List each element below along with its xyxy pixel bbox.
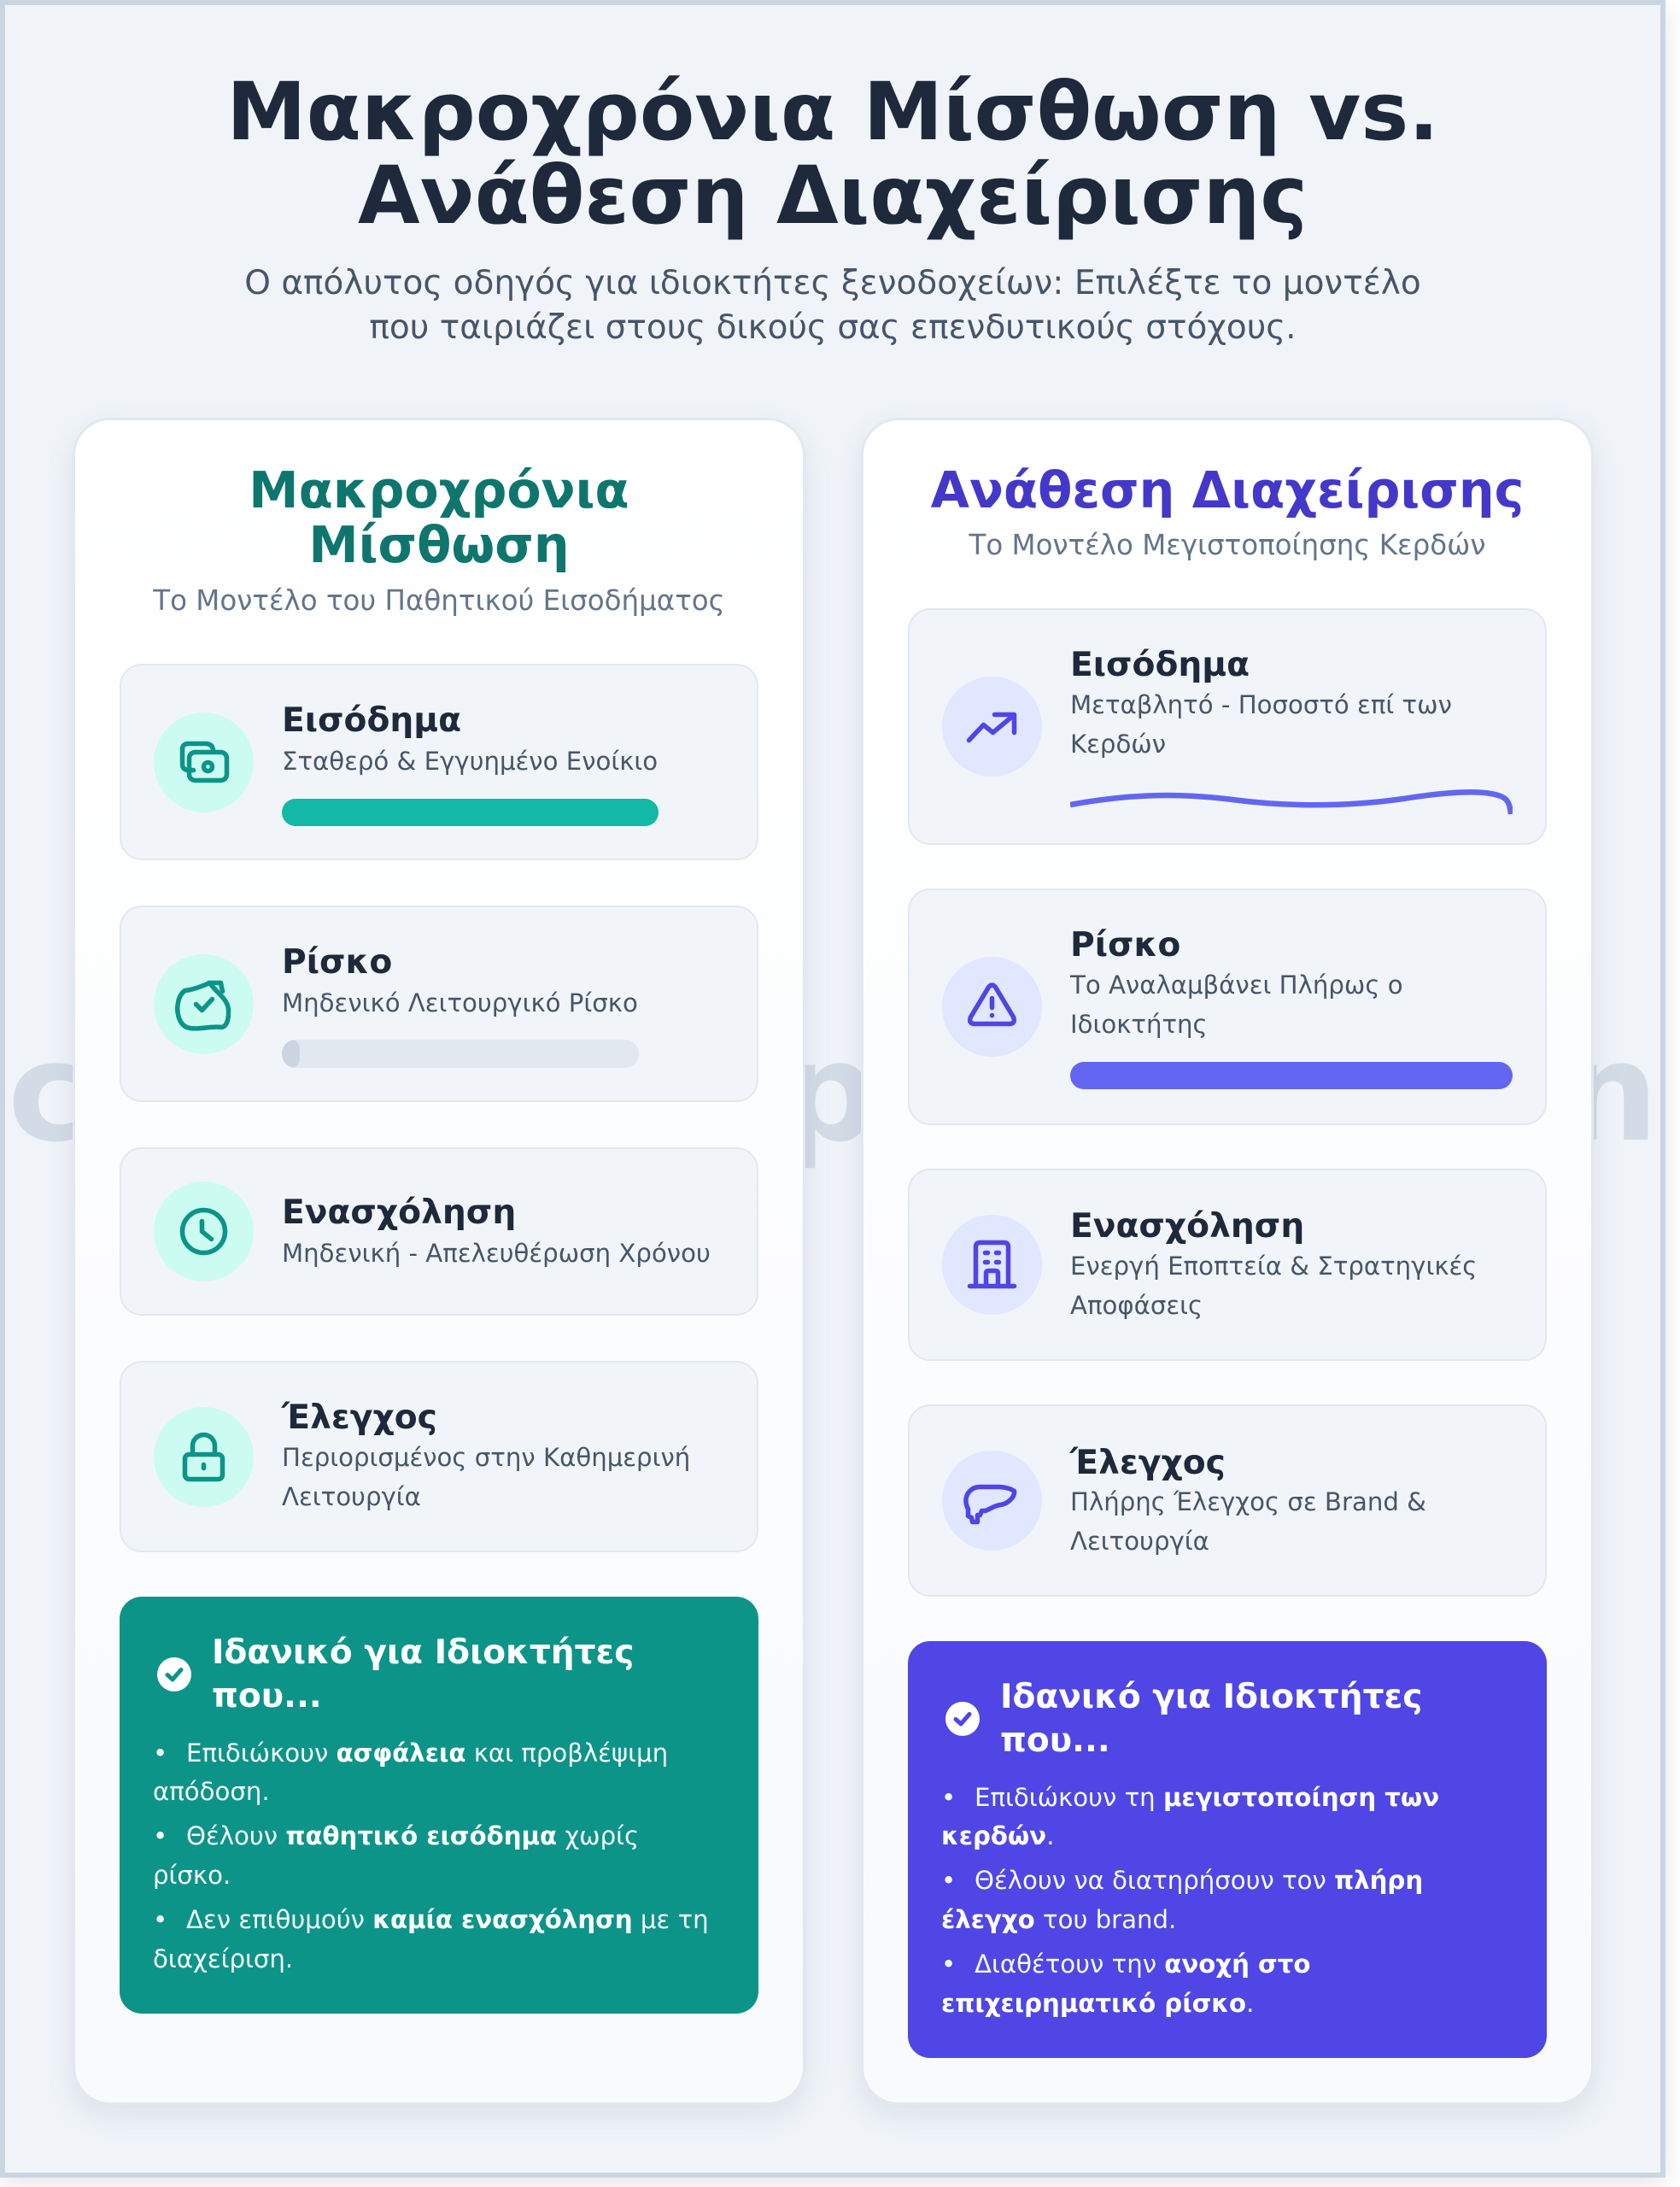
callout heading xyxy=(212,1633,634,1715)
heading: long-term lease: Μακροχρόνια xyxy=(249,461,629,519)
watermark letter c: c xyxy=(8,1012,89,1172)
icon: check badge xyxy=(945,1702,980,1736)
bullet list: Θέλουν να διατηρήσουν τον πλήρη xyxy=(975,1866,1423,1895)
row: risk (lease) xyxy=(120,906,758,1102)
bullet list: Δεν επιθυμούν καμία ενασχόληση με τη xyxy=(186,1905,709,1934)
heading: long-term lease: Μίσθωση xyxy=(308,516,570,574)
bullet list: διαχείριση. xyxy=(153,1944,293,1973)
watermark letter n: n xyxy=(1561,1012,1659,1172)
subheading: profit maximization model: Το Μοντέλο Μεγιστοποίησης Κερδών xyxy=(969,529,1486,561)
bullet list xyxy=(941,1783,1439,2018)
description: Κερδών xyxy=(1070,730,1166,759)
label: Ρίσκο xyxy=(282,943,392,981)
icon: shield check xyxy=(154,954,254,1054)
heading: long-term lease xyxy=(249,461,629,574)
title: Ανάθεση Διαχείρισης xyxy=(358,150,1308,243)
description xyxy=(1069,970,1403,1039)
callout heading: που... xyxy=(212,1677,322,1715)
description: Λειτουργία xyxy=(1070,1527,1209,1556)
bullet list: επιχειρηματικό ρίσκο. xyxy=(941,1989,1254,2018)
title: Μακροχρόνια Μίσθωση vs. xyxy=(226,66,1439,159)
description: Ενεργή Εποπτεία & Στρατηγικές xyxy=(1070,1251,1477,1280)
bullet list: • xyxy=(153,1905,167,1934)
label: Ενασχόληση xyxy=(282,1193,516,1232)
label: Ενασχόληση xyxy=(1070,1206,1304,1246)
panel: long-term lease xyxy=(73,418,805,2105)
description xyxy=(282,1443,690,1511)
callout heading: που... xyxy=(1000,1721,1110,1760)
icon: check badge xyxy=(157,1657,191,1692)
callout: ideal for owners (management) xyxy=(908,1641,1547,2058)
subtitle: Ο απόλυτος οδηγός για ιδιοκτήτες ξενοδοχείων: Επιλέξτε το μοντέλο xyxy=(244,263,1421,302)
subtitle xyxy=(244,263,1421,347)
description xyxy=(1070,690,1452,759)
icon: trending up xyxy=(942,677,1042,777)
bar: zero risk xyxy=(282,1040,639,1068)
bullet list: Επιδιώκουν τη μεγιστοποίηση των xyxy=(975,1783,1439,1812)
bar: full risk xyxy=(1070,1062,1513,1089)
description: Μεταβλητό - Ποσοστό επί των xyxy=(1070,690,1452,719)
row: control (management) xyxy=(908,1404,1547,1596)
icon: building xyxy=(942,1215,1042,1315)
description xyxy=(1070,1487,1426,1556)
bullet list: απόδοση. xyxy=(153,1777,270,1806)
description: Το Αναλαμβάνει Πλήρως ο xyxy=(1070,970,1403,1000)
row: income (management) xyxy=(908,608,1547,844)
title xyxy=(226,66,1439,243)
heading: management contract: Ανάθεση Διαχείρισης xyxy=(931,461,1524,519)
label: Ρίσκο xyxy=(1070,926,1180,964)
row: involvement (lease) xyxy=(120,1147,758,1316)
bar fill xyxy=(282,1040,300,1068)
description: Πλήρης Έλεγχος σε Brand & xyxy=(1070,1487,1426,1516)
subtitle: που ταιριάζει στους δικούς σας επενδυτικούς στόχους. xyxy=(369,308,1297,347)
row: risk (management) xyxy=(908,888,1547,1124)
callout heading: Ιδανικό για Ιδιοκτήτες xyxy=(212,1633,634,1672)
icon: lock xyxy=(154,1407,254,1507)
description: Σταθερό & Εγγυημένο Ενοίκιο xyxy=(282,747,658,776)
subheading: passive income model: Το Μοντέλο του Παθητικού Εισοδήματος xyxy=(153,584,725,617)
description xyxy=(1070,1251,1477,1319)
bar: fixed income xyxy=(282,799,659,826)
description: Λειτουργία xyxy=(282,1482,421,1511)
description: Μηδενικό Λειτουργικό Ρίσκο xyxy=(282,988,638,1017)
label: Έλεγχος xyxy=(1070,1444,1226,1481)
description: Περιορισμένος στην Καθημερινή xyxy=(282,1443,690,1472)
bullet list: Θέλουν παθητικό εισόδημα χωρίς xyxy=(186,1821,639,1850)
bullet list: • xyxy=(153,1821,167,1850)
callout: ideal for owners (lease) xyxy=(120,1597,758,2014)
description: Αποφάσεις xyxy=(1070,1290,1203,1319)
watermark letter p: p xyxy=(780,1012,878,1172)
bullet list: • xyxy=(153,1738,167,1768)
bullet list: • xyxy=(941,1950,956,1979)
row: involvement (management) xyxy=(908,1169,1547,1360)
label: Εισόδημα xyxy=(1070,646,1250,683)
description: Ιδιοκτήτης xyxy=(1070,1010,1208,1039)
panel: management contract xyxy=(861,418,1594,2105)
bullet list: • xyxy=(941,1783,956,1812)
bullet list xyxy=(153,1738,709,1973)
icon: clock xyxy=(154,1181,254,1281)
callout heading: Ιδανικό για Ιδιοκτήτες xyxy=(1000,1678,1422,1716)
icon: brand shape xyxy=(942,1451,1042,1551)
icon: money xyxy=(154,712,254,812)
bullet list: • xyxy=(941,1866,956,1895)
bullet list: Επιδιώκουν ασφάλεια και προβλέψιμη xyxy=(186,1738,668,1768)
label: Έλεγχος xyxy=(282,1398,437,1437)
bullet list: έλεγχο του brand. xyxy=(941,1905,1176,1934)
icon: warning xyxy=(942,957,1042,1057)
bullet list: κερδών. xyxy=(941,1821,1054,1850)
row: control (lease) xyxy=(120,1361,758,1551)
label: Εισόδημα xyxy=(282,701,461,740)
row: income (lease) xyxy=(120,664,758,860)
wavy line: variable income xyxy=(1070,789,1513,815)
bullet list: ρίσκο. xyxy=(153,1861,231,1890)
callout heading xyxy=(1000,1678,1422,1760)
description: Μηδενική - Απελευθέρωση Χρόνου xyxy=(282,1239,711,1268)
bullet list: Διαθέτουν την ανοχή στο xyxy=(975,1950,1310,1979)
